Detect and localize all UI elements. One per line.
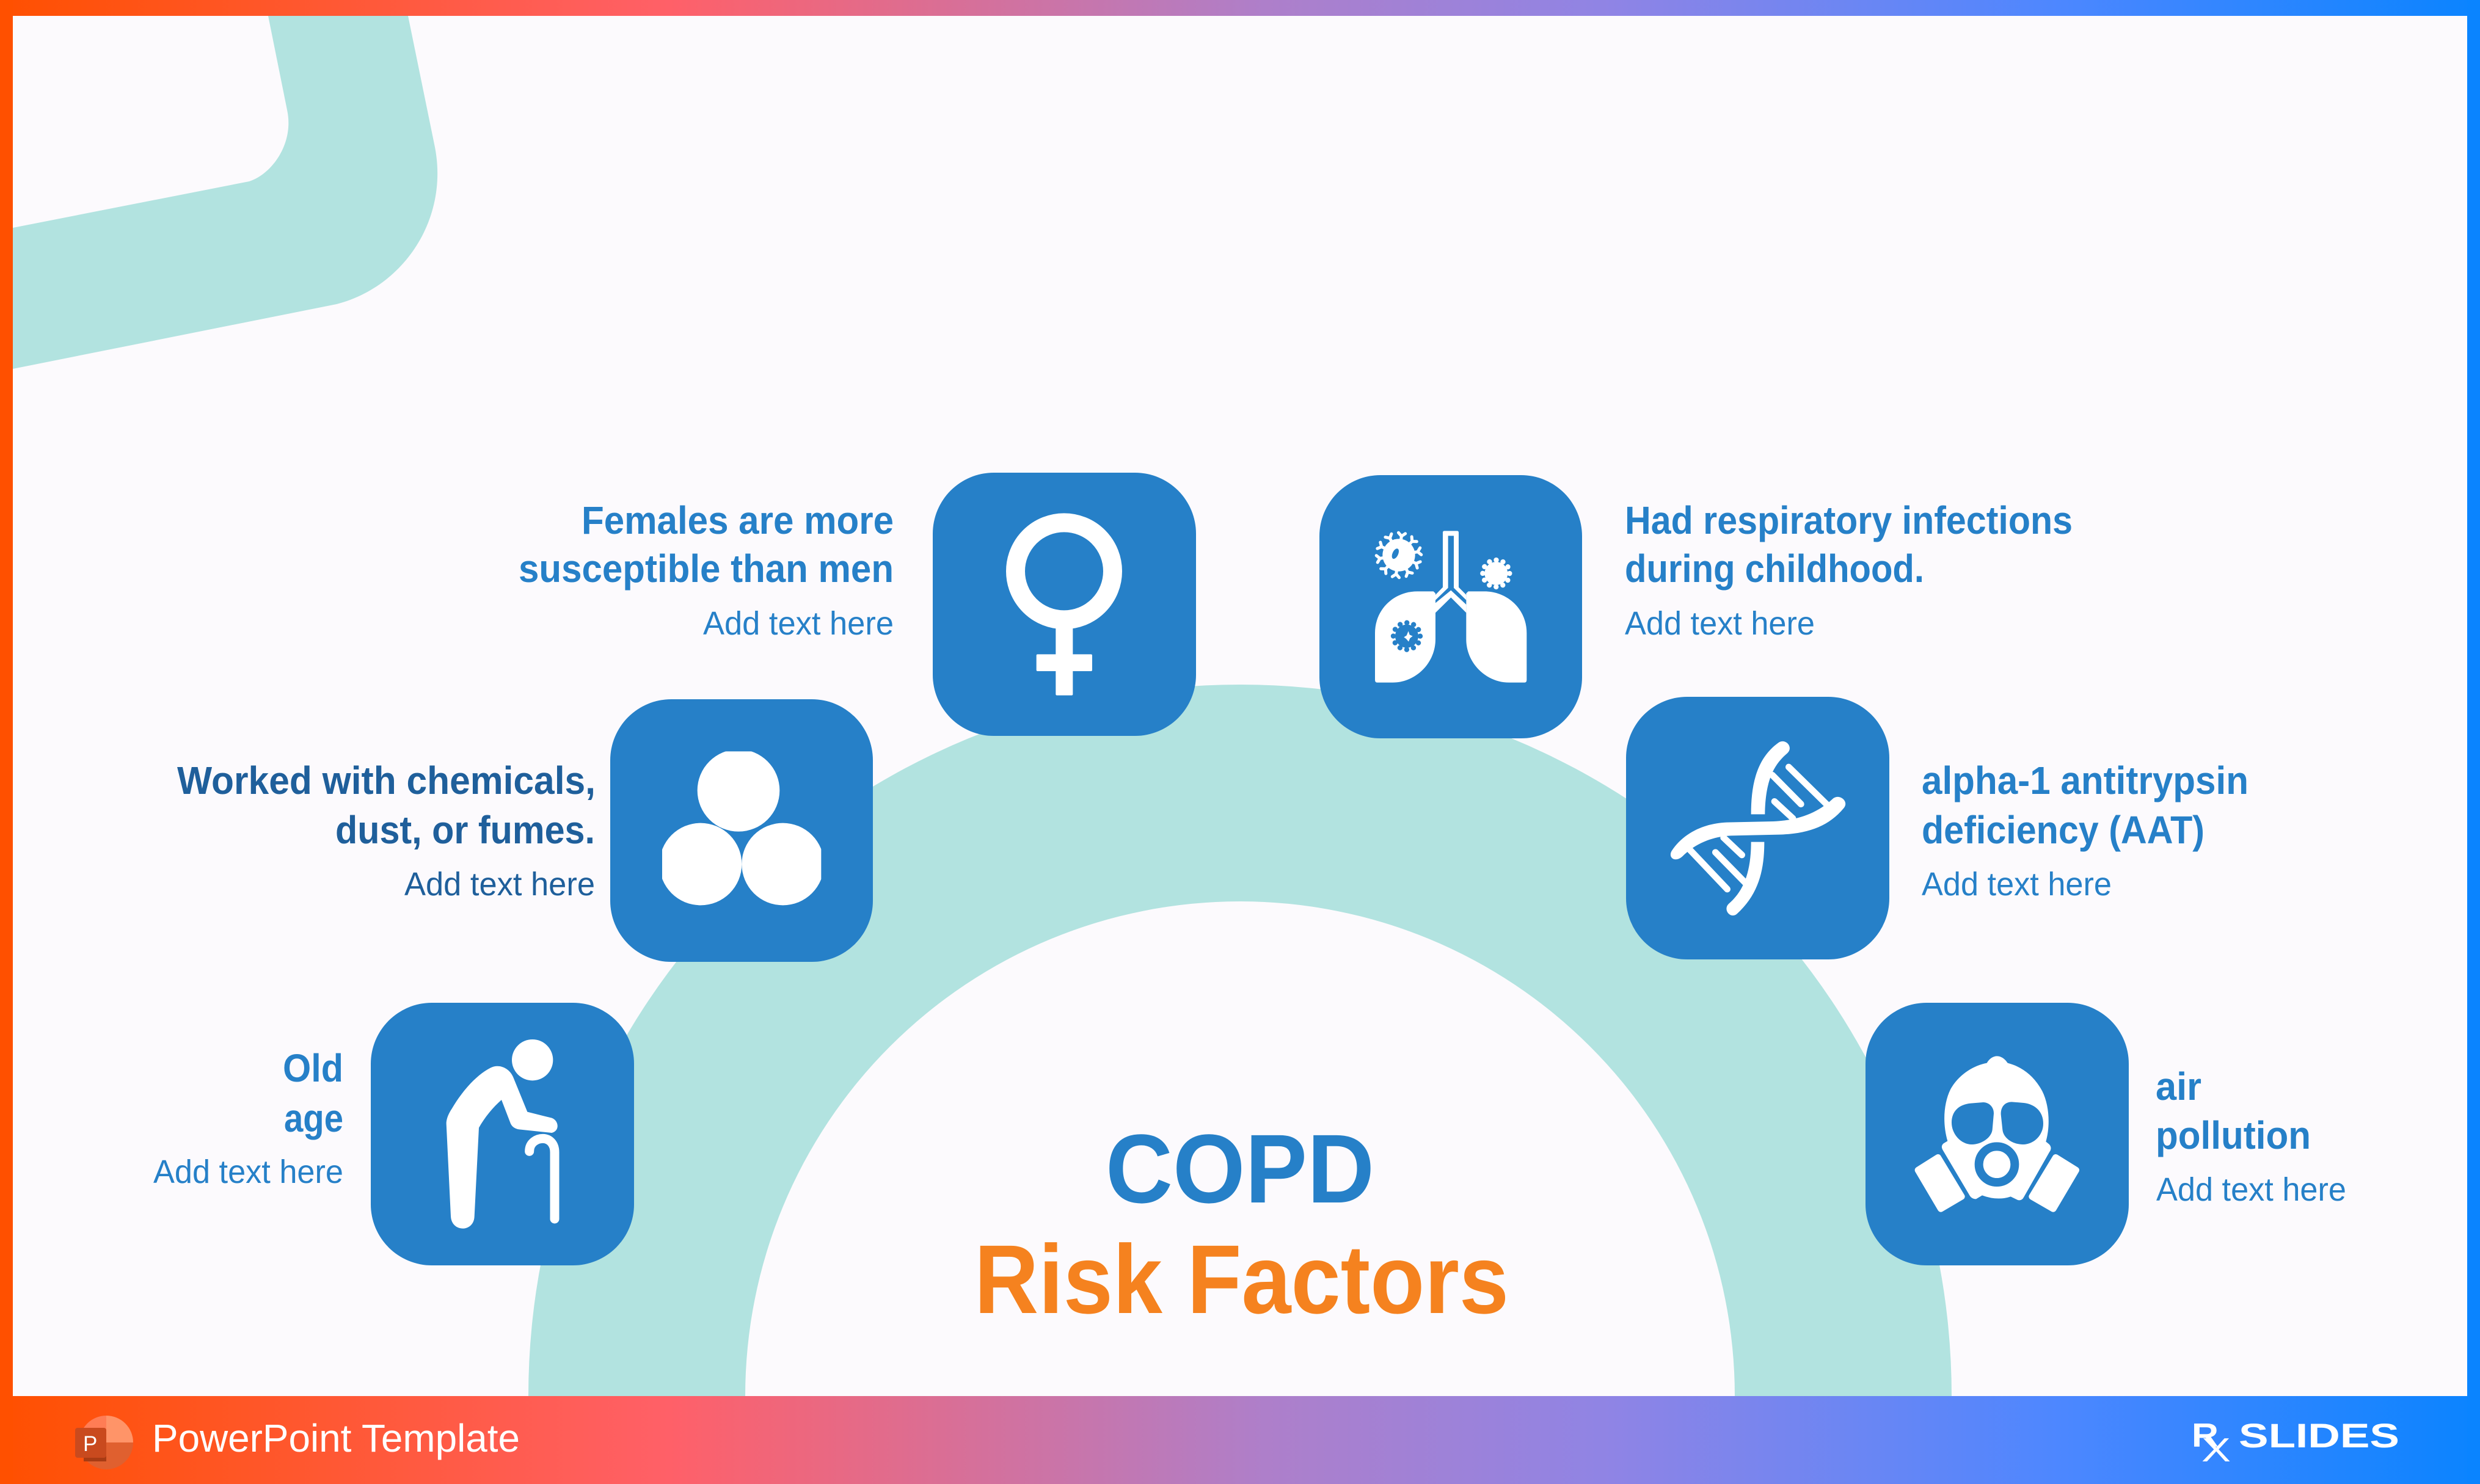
logo: RxSlides [2192,1416,2399,1469]
icon: DNA helix [1671,741,1845,915]
tile: old age [371,1003,634,1265]
icon: PowerPoint logo [75,1416,133,1469]
panel: air pollution [1865,1003,2346,1265]
text: alpha-1 antitrypsin [1922,758,2248,903]
footer label: PowerPoint Template [152,1416,520,1460]
text: old age: Old [283,1046,343,1090]
text: alpha-1 antitrypsin: alpha-1 antitrypsin [1922,758,2248,802]
tile: air pollution [1865,1003,2129,1265]
decorative corner band [13,16,437,369]
text: chemicals [177,758,596,903]
footer [75,1416,2399,1469]
text: respiratory infections: Add text here [1625,605,1815,642]
text: air pollution: air [2156,1064,2201,1108]
text: females: Add text here [703,605,894,642]
tile: females [933,473,1196,736]
text: old age: Add text here [153,1154,343,1190]
text: alpha-1 antitrypsin: Add text here [1922,866,2112,903]
panel: females [519,473,1196,736]
panel: alpha-1 antitrypsin [1626,697,2248,959]
text: respiratory infections: Had respiratory infections [1625,498,2073,542]
tile: chemicals [610,699,873,962]
text: old age: age [284,1096,343,1140]
text: chemicals: dust, or fumes. [335,808,595,852]
icon: PowerPoint logo: P [83,1432,97,1456]
text: respiratory infections: during childhood. [1625,547,1924,591]
logo: RxSlides: R [2192,1416,2219,1454]
tile: alpha-1 antitrypsin [1626,697,1889,959]
title [974,1114,1509,1334]
text: air pollution [2156,1064,2346,1208]
panel: chemicals [177,699,873,962]
logo: RxSlides: SLIDES [2239,1416,2399,1455]
icon: female symbol [1015,523,1112,696]
tile: respiratory infections [1319,475,1582,738]
text: females [519,498,894,642]
text: chemicals: Add text here [404,866,595,903]
panel: old age [153,1003,634,1265]
text: air pollution: pollution [2156,1113,2311,1157]
right frame edge [2467,0,2480,1484]
text: air pollution: Add text here [2156,1171,2346,1208]
title: COPD [1106,1114,1374,1223]
icon: lungs with viruses [1375,531,1526,683]
text: respiratory infections [1625,498,2073,642]
panel: respiratory infections [1319,475,2073,738]
text: females: Females are more [582,498,894,542]
icon: three particles [660,749,824,905]
text: alpha-1 antitrypsin: deficiency (AAT) [1922,808,2205,852]
text: females: susceptible than men [519,547,894,591]
title: Risk Factors [974,1224,1509,1334]
icon: gas mask [1918,1056,2076,1209]
central arch [528,685,1952,1396]
text: old age [153,1046,343,1190]
logo: RxSlides: X [2201,1431,2231,1469]
text: chemicals: Worked with chemicals, [177,758,596,802]
left frame edge [0,0,13,1484]
icon: elderly person with cane [447,1039,558,1229]
